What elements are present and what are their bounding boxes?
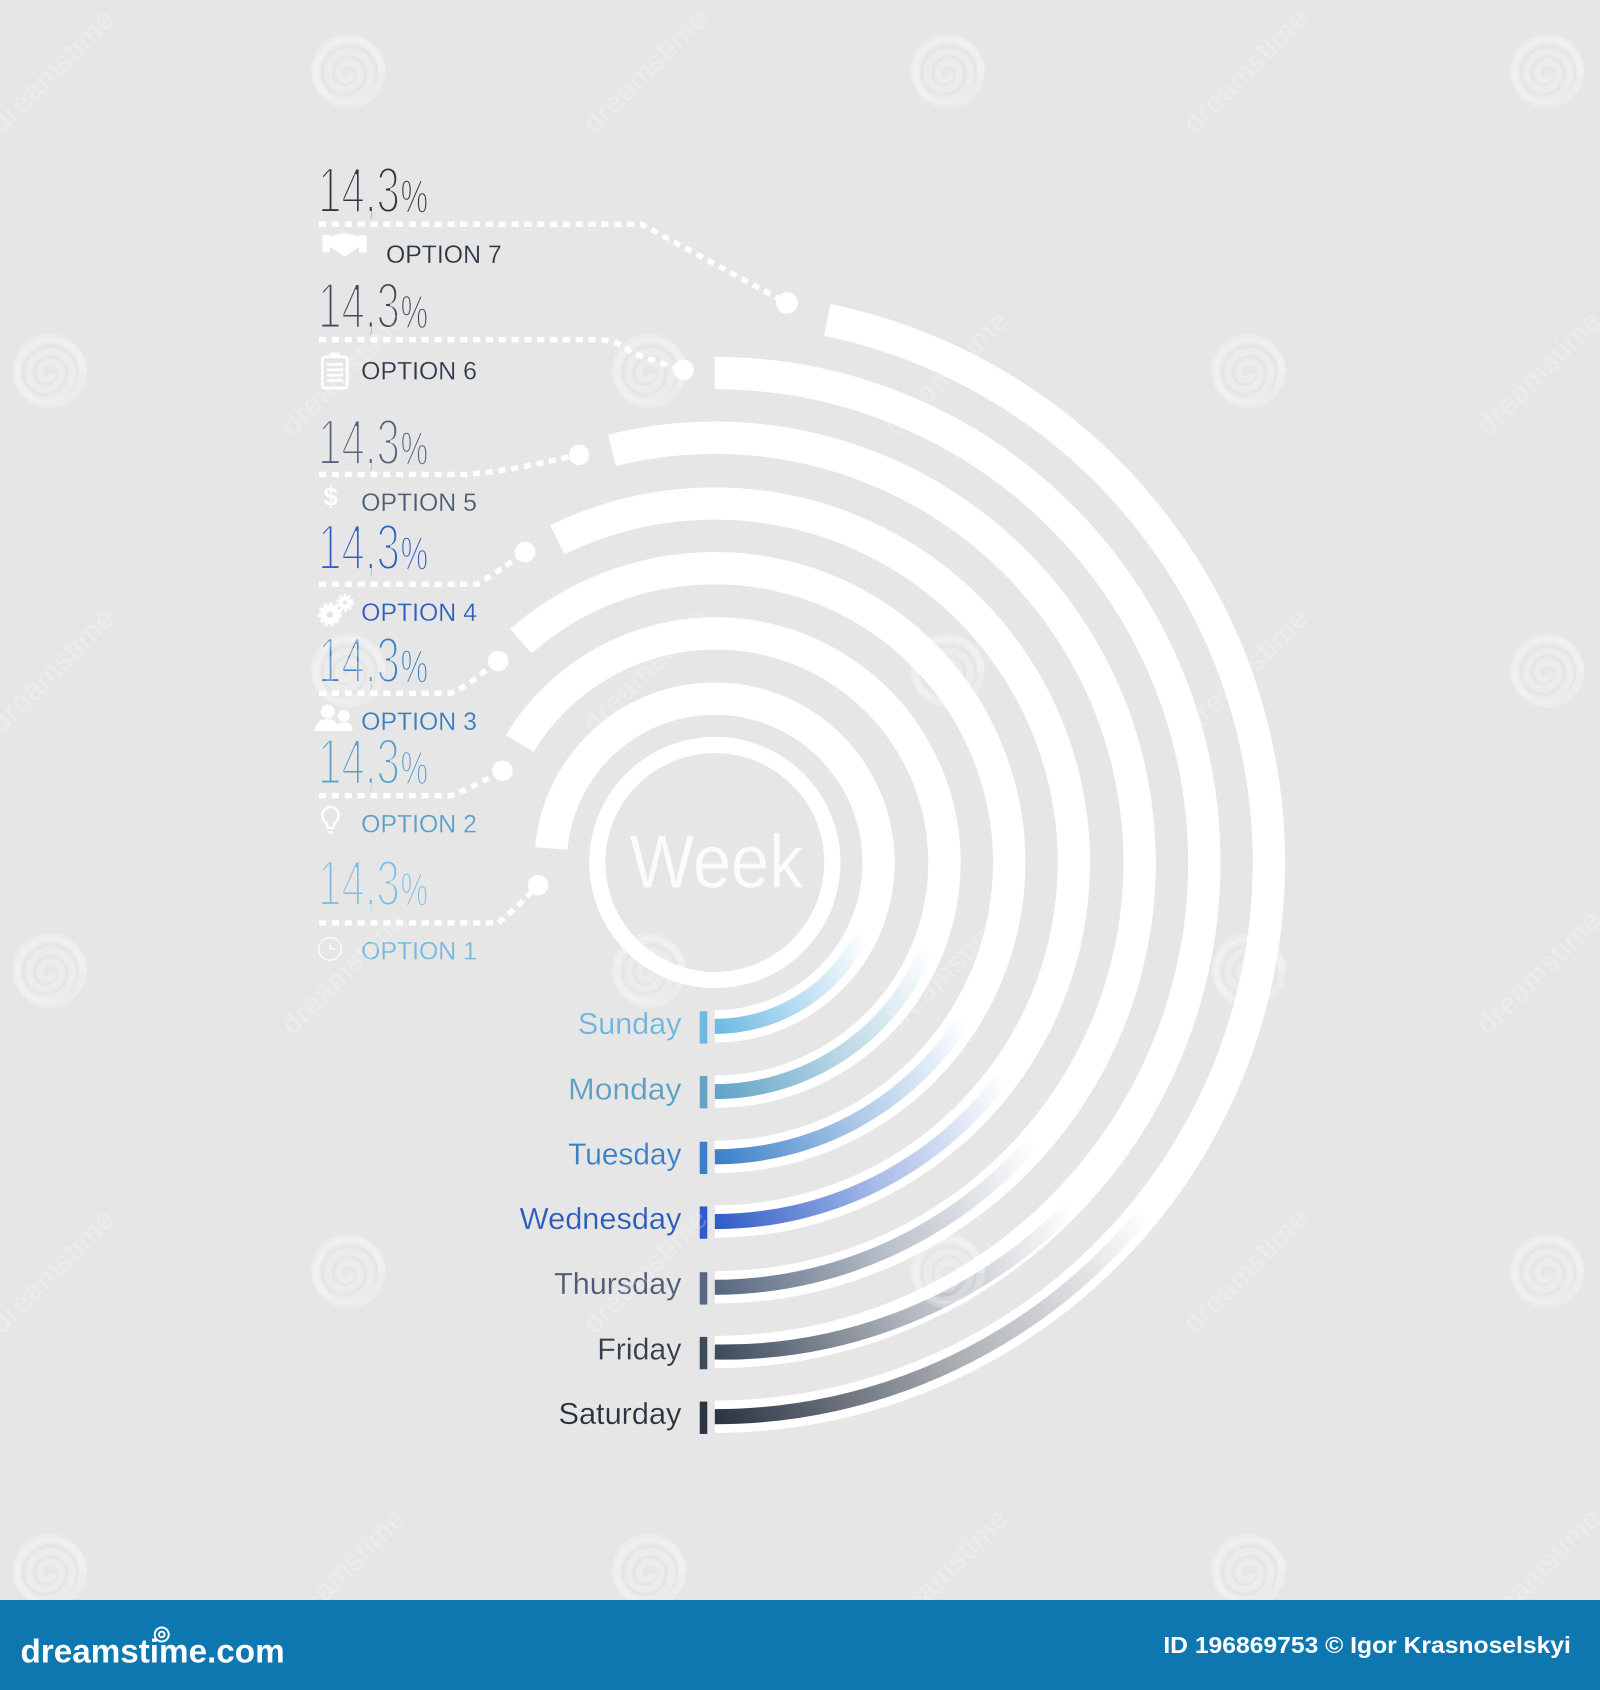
watermark text: dreamstime <box>577 602 715 740</box>
option label: OPTION 6 <box>361 359 477 386</box>
option 3 block <box>315 624 508 736</box>
watermark text: dreamstime <box>878 304 1016 442</box>
Monday label: Monday <box>568 1074 682 1107</box>
day legend <box>520 1008 707 1434</box>
option 4 block <box>318 511 535 627</box>
option label: OPTION 1 <box>361 939 477 966</box>
Wednesday label: Wednesday <box>520 1203 682 1236</box>
ring: option 6 / Friday <box>715 373 1204 1352</box>
connector <box>319 761 513 796</box>
colour band: Sunday <box>715 934 863 1026</box>
watermark text: dreamstime <box>275 904 413 1041</box>
option label: OPTION 7 <box>386 242 502 269</box>
colour band: Friday <box>715 1208 1071 1352</box>
option 1 block <box>318 848 548 966</box>
value 14,3%: 14,3% <box>318 154 428 227</box>
watermark text: dreamstime <box>577 1202 715 1340</box>
icon: light bulb <box>322 807 339 832</box>
icon: clipboard <box>322 353 347 388</box>
value 14,3%: 14,3% <box>318 726 428 798</box>
colour band: Wednesday <box>715 1078 1003 1222</box>
icon: dollar: $ <box>323 484 338 512</box>
watermark text: dreamstime <box>1178 1202 1315 1340</box>
ring: option 7 / Saturday <box>715 320 1269 1417</box>
icon: handshake <box>322 233 367 257</box>
icon: clock <box>319 937 341 960</box>
option 2 block <box>318 726 513 838</box>
ring: option 2 / Monday <box>520 633 944 1092</box>
connector <box>319 224 798 314</box>
value 14,3%: 14,3% <box>318 848 428 920</box>
option 7 block <box>318 154 798 314</box>
watermark text: dreamstime <box>878 1502 1016 1640</box>
watermark text: dreamstime <box>1178 2 1315 140</box>
colour band: Saturday <box>715 1211 1146 1417</box>
Sunday label: Sunday <box>578 1008 682 1041</box>
option 6 block <box>318 270 694 388</box>
ring: option 1 / Sunday <box>551 699 879 1026</box>
watermark text: dreamstime <box>878 904 1016 1041</box>
watermark text: dreamstime <box>577 2 715 140</box>
connector <box>319 340 694 380</box>
Thursday label: Thursday <box>554 1268 682 1301</box>
centre title: Week: Week <box>630 819 803 903</box>
colour band: Monday <box>715 948 927 1092</box>
watermark text: dreamstime <box>275 304 413 442</box>
colour band: Thursday <box>715 1140 1035 1287</box>
value 14,3%: 14,3% <box>318 511 428 583</box>
Saturday label: Saturday <box>558 1398 682 1431</box>
concentric ring chart <box>520 320 1269 1417</box>
connector <box>319 542 535 584</box>
option label: OPTION 4 <box>361 600 477 627</box>
connector <box>319 875 548 923</box>
option label: OPTION 5 <box>361 490 477 517</box>
ring: option 4 / Wednesday <box>557 503 1074 1222</box>
watermark text: dreamstime <box>1178 602 1315 740</box>
ring: option 3 / Tuesday <box>521 568 1009 1157</box>
value 14,3%: 14,3% <box>318 270 428 342</box>
connector <box>319 651 508 693</box>
footer credit: ID 196869753 © Igor Krasnoselskyi <box>1163 1632 1571 1658</box>
Friday label: Friday <box>597 1334 682 1367</box>
centre ring <box>597 745 832 980</box>
option label: OPTION 3 <box>361 709 477 736</box>
ring: option 5 / Thursday <box>612 438 1140 1287</box>
icon: gears <box>320 595 353 625</box>
icon: people <box>315 705 353 731</box>
connector <box>319 445 589 474</box>
Tuesday label: Tuesday <box>568 1138 682 1171</box>
option label: OPTION 2 <box>361 811 477 838</box>
value 14,3%: 14,3% <box>318 407 428 479</box>
footer logo spiral <box>155 1627 169 1641</box>
watermark text: dreamstime <box>275 1502 413 1640</box>
colour band: Tuesday <box>715 1019 964 1157</box>
footer bar <box>0 1600 1600 1690</box>
option 5 block <box>318 407 589 517</box>
footer logo text: dreamstime.com <box>20 1634 285 1671</box>
value 14,3%: 14,3% <box>318 624 428 697</box>
